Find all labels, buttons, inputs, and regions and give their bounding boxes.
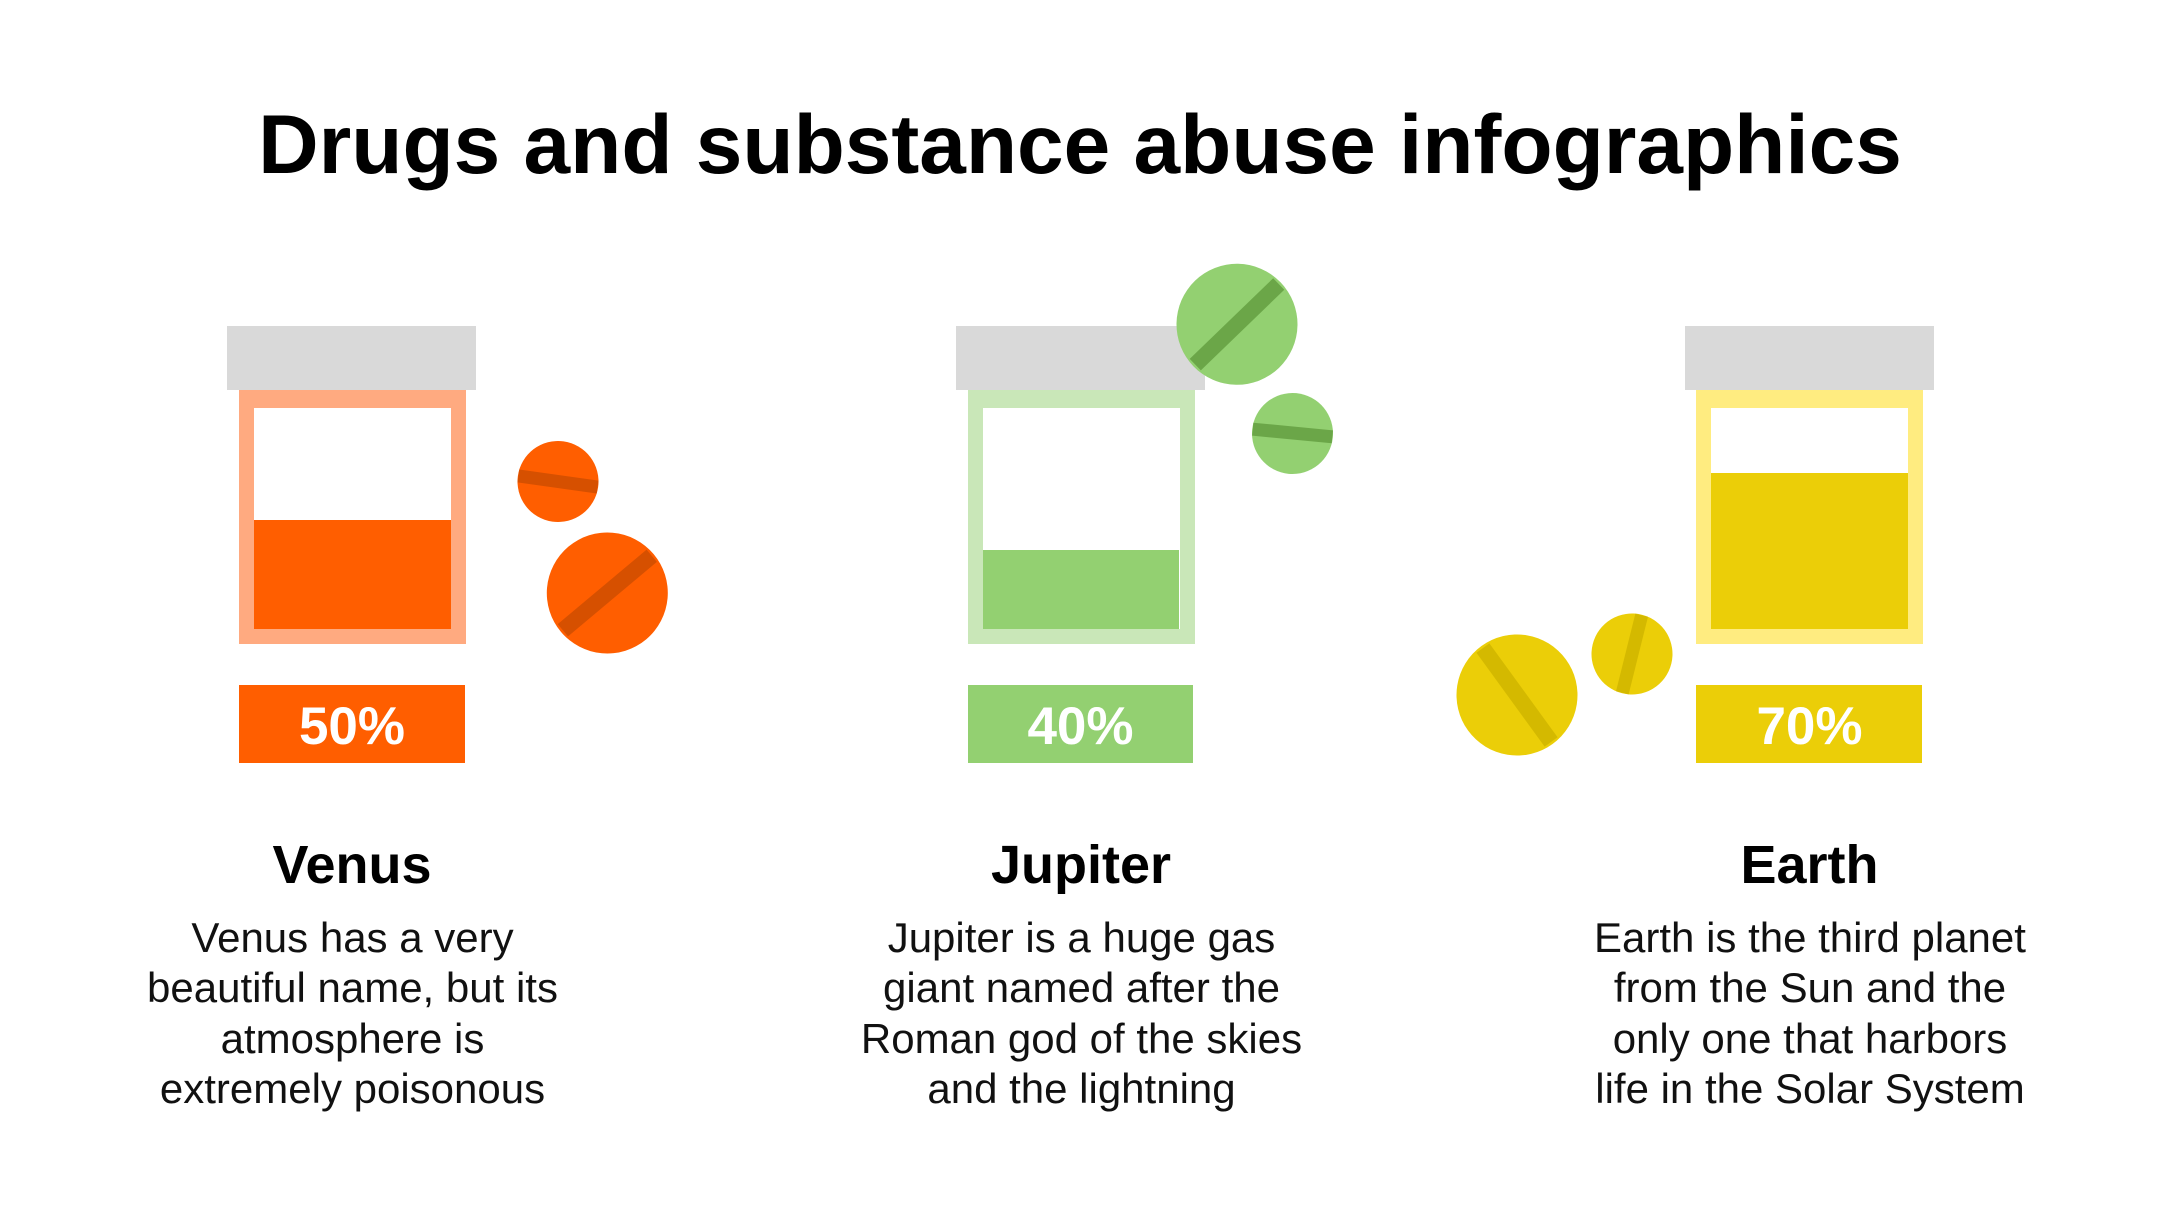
text block: Venus description: Venus has a very bbox=[191, 914, 514, 961]
icon: small orange pill bbox=[512, 436, 604, 527]
percentage badge: 50% bbox=[239, 685, 465, 763]
icon: small green pill bbox=[1248, 389, 1337, 478]
text block: Venus description: beautiful name, but its bbox=[147, 964, 558, 1011]
panel: Earth bbox=[1432, 326, 2026, 1112]
text block: Venus description: extremely poisonous bbox=[160, 1065, 545, 1112]
heading: Jupiter: Jupiter bbox=[991, 835, 1171, 895]
percentage badge: 40%: 40% bbox=[1027, 697, 1134, 756]
heading: Earth: Earth bbox=[1740, 835, 1879, 895]
icon: large green pill bbox=[1151, 239, 1323, 410]
panel: Jupiter bbox=[861, 239, 1337, 1112]
icon: Earth jar at 70% bbox=[1685, 326, 1934, 644]
percentage badge: 70% bbox=[1696, 685, 1922, 763]
text block: Jupiter description bbox=[861, 914, 1302, 1112]
text block: Venus description bbox=[147, 914, 558, 1112]
text block: Jupiter description: and the lightning bbox=[927, 1065, 1236, 1112]
icon: Venus jar at 50% bbox=[227, 326, 476, 644]
text block: Earth description bbox=[1594, 914, 2026, 1112]
icon: small yellow pill bbox=[1583, 605, 1681, 703]
text block: Earth description: Earth is the third planet bbox=[1594, 914, 2026, 961]
text block: Jupiter description: giant named after the bbox=[883, 964, 1280, 1011]
heading: Venus: Venus bbox=[272, 835, 432, 895]
panel: Venus bbox=[147, 326, 693, 1112]
title: Drugs and substance abuse infographics bbox=[258, 97, 1902, 191]
percentage badge: 70%: 70% bbox=[1756, 697, 1863, 756]
icon: Jupiter jar at 40% bbox=[956, 326, 1205, 644]
text block: Venus description: atmosphere is bbox=[221, 1015, 484, 1062]
text block: Jupiter description: Roman god of the skies bbox=[861, 1015, 1302, 1062]
icon: large orange pill bbox=[522, 508, 693, 678]
text block: Earth description: life in the Solar System bbox=[1595, 1065, 2025, 1112]
icon: large yellow pill bbox=[1432, 610, 1602, 780]
text block: Earth description: from the Sun and the bbox=[1614, 964, 2006, 1011]
percentage badge: 50%: 50% bbox=[299, 697, 405, 756]
text block: Earth description: only one that harbors bbox=[1613, 1015, 2007, 1062]
percentage badge: 40% bbox=[968, 685, 1193, 763]
text block: Jupiter description: Jupiter is a huge gas bbox=[888, 914, 1275, 961]
